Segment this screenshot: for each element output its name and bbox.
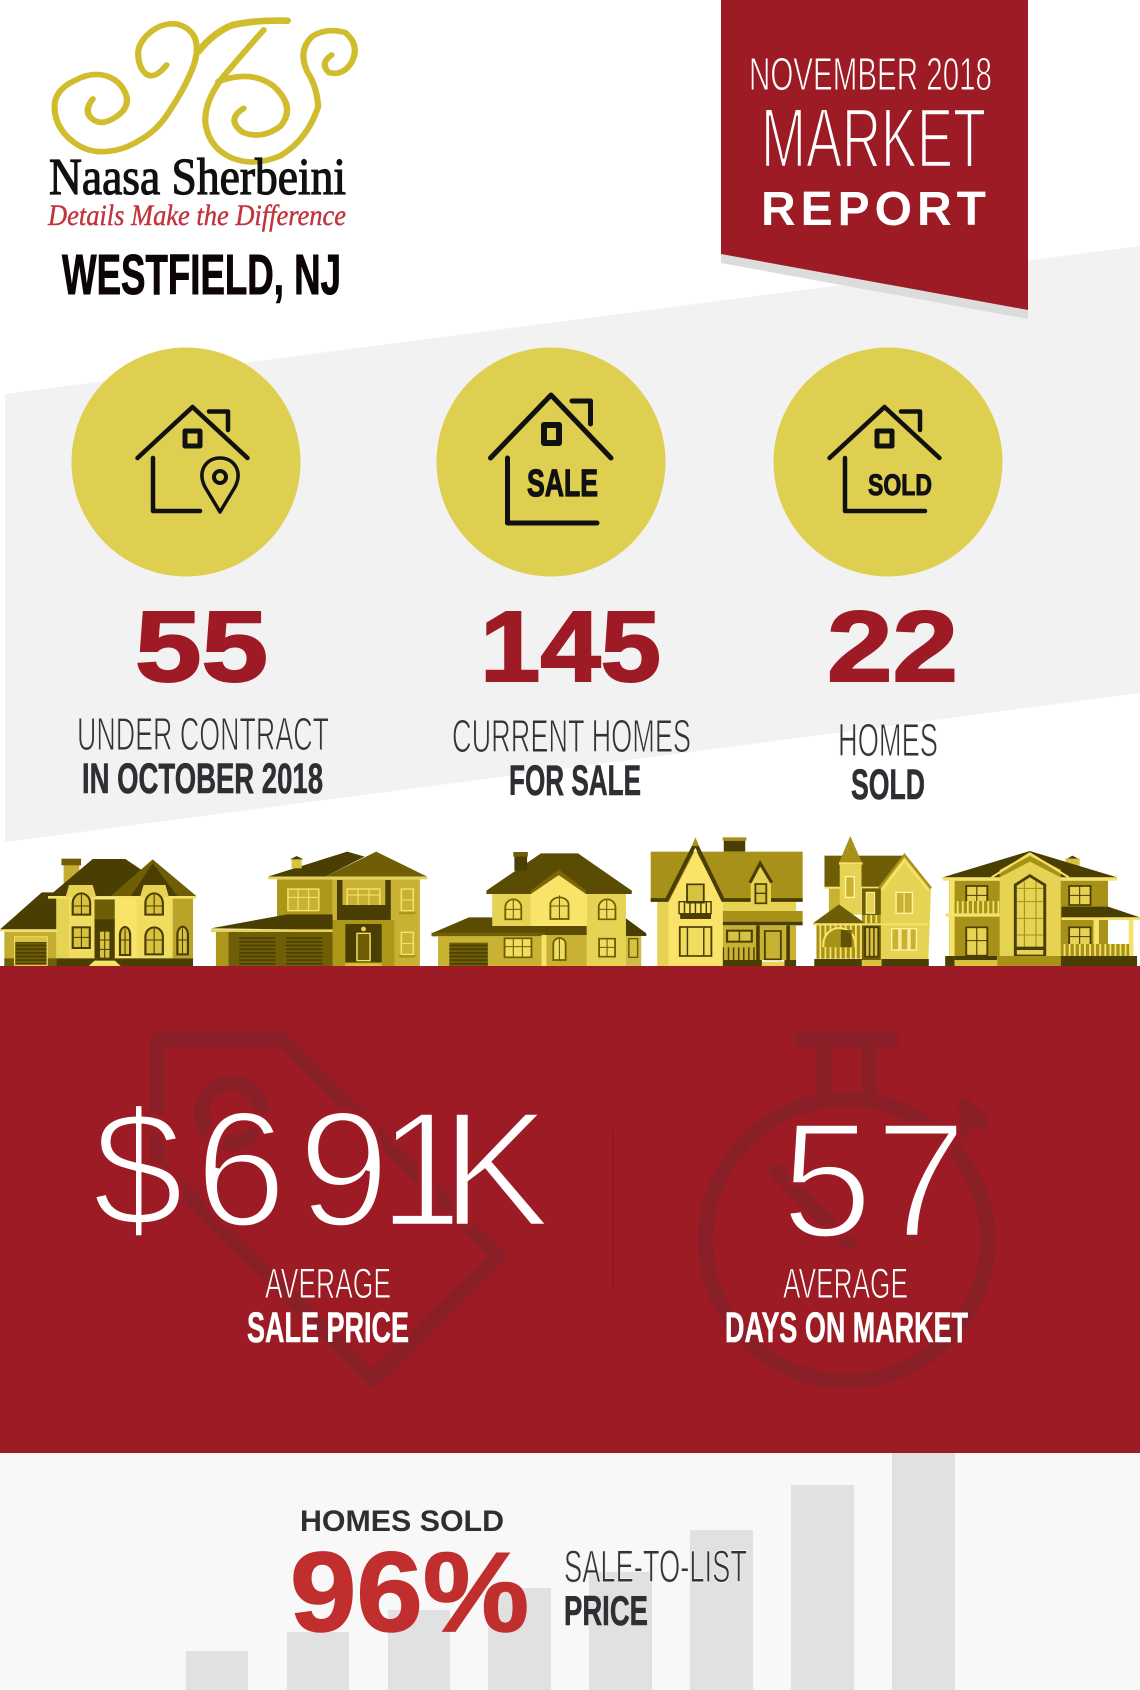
icon: house with sold sign: SOLD: [868, 469, 932, 502]
stat number 55: 55: [135, 591, 268, 703]
stat label in october 2018: IN OCTOBER 2018: [82, 755, 323, 803]
house 2: [211, 852, 427, 967]
metric label sale price: SALE PRICE: [247, 1304, 409, 1352]
heading homes sold: HOMES SOLD: [300, 1505, 504, 1538]
icon: house with sale sign: SALE: [527, 463, 598, 505]
house 5: [813, 836, 931, 967]
stat number 145: 145: [480, 591, 661, 703]
metric value days on market: 57: [781, 1088, 967, 1272]
grey slanted background band: [5, 246, 1140, 842]
banner title report: REPORT: [761, 183, 986, 236]
panel: sale to list: [0, 1453, 1140, 1690]
divider: [612, 1130, 614, 1289]
house 4: [651, 837, 803, 967]
icon: stopwatch watermark: [706, 1040, 988, 1381]
metric label days on market: DAYS ON MARKET: [725, 1304, 968, 1352]
label price: PRICE: [564, 1587, 648, 1634]
location heading: WESTFIELD, NJ: [62, 243, 341, 307]
banner title market: MARKET: [761, 91, 986, 185]
stat value 96 percent: 96%: [290, 1529, 529, 1655]
panel background: [0, 966, 1140, 1453]
icon: price tag watermark: [158, 1040, 498, 1379]
banner ribbon: [721, 0, 1028, 310]
logo tagline: Details Make the Difference: [47, 199, 346, 232]
metric value average sale price: $691K: [92, 1077, 551, 1261]
house 1: [0, 859, 196, 966]
panel: under contract: [72, 348, 329, 803]
stat label current homes: CURRENT HOMES: [452, 710, 691, 762]
logo name: Naasa Sherbeini: [49, 149, 346, 206]
house 6: [943, 851, 1140, 968]
house 3: [431, 852, 646, 967]
banner month: NOVEMBER 2018: [749, 48, 992, 100]
icon: house with sold sign: [774, 348, 1002, 576]
banner shadow: [721, 254, 1028, 319]
stat label under contract: UNDER CONTRACT: [77, 708, 329, 760]
panel: report banner: [721, 0, 1028, 319]
panel: homes for sale: [436, 348, 691, 805]
panel background: [0, 1453, 1140, 1690]
icon: house with location pin: [72, 348, 300, 576]
metric label average: AVERAGE: [265, 1260, 391, 1308]
logo: [47, 21, 355, 232]
row of houses: [0, 836, 1140, 968]
stat label homes: HOMES: [838, 714, 938, 766]
bar chart watermark: [186, 1453, 955, 1690]
logo monogram swirls: [55, 21, 355, 162]
stat number 22: 22: [827, 591, 958, 703]
label sale-to-list: SALE-TO-LIST: [564, 1541, 747, 1592]
panel: homes sold: [774, 348, 1002, 809]
metric label average: AVERAGE: [783, 1260, 908, 1308]
stat label sold: SOLD: [851, 761, 925, 809]
panel: red metrics section: [0, 966, 1140, 1453]
stat label for sale: FOR SALE: [509, 757, 641, 805]
icon: house with sale sign: [436, 348, 666, 576]
